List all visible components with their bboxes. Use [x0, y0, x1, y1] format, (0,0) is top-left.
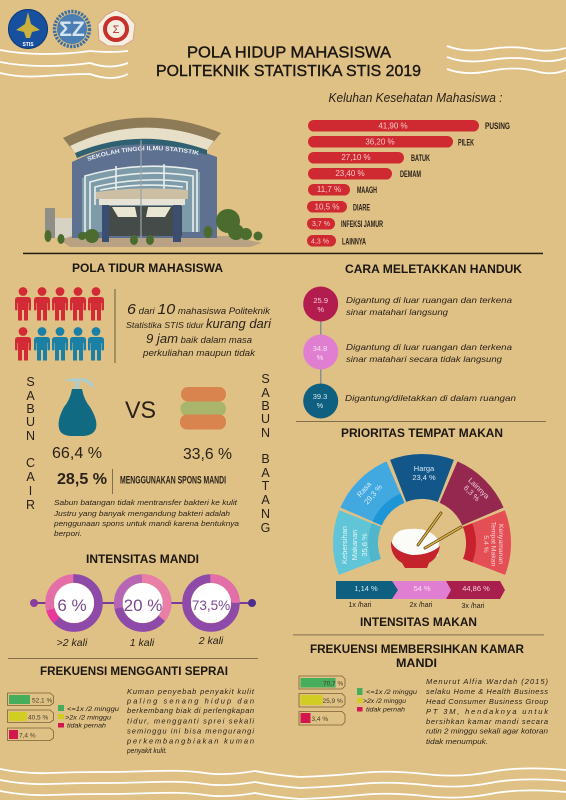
waves: top left — [0, 50, 128, 78]
heading: handuk: CARA MELETAKKAN HANDUK — [345, 264, 523, 276]
bar: pusing — [308, 120, 510, 132]
bar: batuk: BATUK — [411, 153, 430, 164]
heading: pola tidur: POLA TIDUR MAHASISWA — [72, 263, 223, 275]
heading: intensitas makan: INTENSITAS MAKAN — [360, 617, 477, 629]
bar: lainnya: 4,3 % — [311, 238, 329, 246]
item: digantung langsung: Digantung di luar ruangan dan terkena — [346, 295, 512, 305]
segment: lainnya — [440, 461, 504, 525]
segment: kenyamanan: 5,4 % — [482, 535, 489, 553]
battery chart: kamar mandi: 70,7 % — [323, 680, 343, 688]
bar: lainnya: LAINNYA — [342, 236, 366, 248]
stat: sabun batang: 33,6 % — [183, 446, 232, 463]
bar: diare: 10,5 % — [315, 202, 339, 212]
text: seprai note: Kuman penyebab penyakit kulit — [127, 687, 255, 696]
logo: STIS: STIS — [22, 42, 34, 48]
segment: lainnya: Lainnya — [466, 476, 492, 501]
segment: kenyamanan: Kenyamanan — [497, 524, 504, 564]
heading: kamar mandi: FREKUENSI MEMBERSIHKAN KAMAR — [310, 644, 525, 656]
text: seprai note — [126, 687, 255, 755]
logo: gear: ΣZ — [59, 18, 85, 41]
segment: rasa: Rasa — [355, 479, 374, 499]
ring: 1 time: 1 kali — [130, 637, 155, 649]
ring: 1 time: 20 % — [124, 596, 162, 615]
panel: intensitas mandi — [30, 554, 256, 649]
text: pola tidur: 9 jam baik dalam masa — [146, 332, 252, 346]
panel: frekuensi kamar mandi — [299, 644, 549, 746]
segment: kebersihan: 35,6 % — [360, 533, 369, 557]
bar: batuk — [308, 152, 430, 164]
text: sabun note: penggunaan spons untuk mandi karena bentuknya — [53, 519, 239, 528]
panel: pola tidur — [15, 263, 272, 363]
vertical label: sabun cair: R — [26, 498, 35, 512]
item: di dalam ruangan: 39.3 — [313, 392, 327, 401]
panel: handuk — [303, 264, 523, 418]
bar: infeksi jamur — [307, 218, 383, 230]
bar: maagh: MAAGH — [357, 185, 377, 196]
stat: sabun cair: 66,4 % — [52, 445, 102, 462]
segment: kebersihan — [333, 510, 381, 575]
text: kamar mandi note: Menurut Alfia Wardah (2015) — [426, 677, 548, 686]
bar: demam: 23,40 % — [335, 169, 365, 178]
vertical label: sabun batang: T — [262, 479, 270, 493]
logo: shield: Σ — [113, 24, 120, 36]
chart: intensitas makan arrows: 1x /hari — [349, 602, 372, 609]
vertical label: sabun batang: A — [261, 466, 270, 480]
text: pola tidur — [126, 301, 272, 358]
ring: 2 times — [186, 578, 236, 647]
stat: spons mandi: MENGGUNAKAN SPONS MANDI — [120, 474, 226, 486]
connector — [30, 599, 256, 607]
item: digantung langsung: sinar matahari langsung — [346, 307, 448, 317]
vertical label: sabun cair: N — [26, 429, 35, 443]
segment: harga — [390, 454, 454, 502]
ring: 2 times: 73,5% — [192, 598, 230, 613]
bar: demam: DEMAM — [400, 169, 421, 180]
item: digantung tidak langsung: 34.8 — [313, 344, 327, 353]
chart: intensitas makan arrows: 54 % — [413, 584, 431, 593]
item: digantung langsung: 25.9 — [313, 296, 328, 305]
heading: kamar mandi: MANDI — [396, 658, 437, 670]
vertical label: sabun cair: S — [26, 375, 35, 389]
vertical label: sabun cair: A — [26, 389, 35, 403]
vertical label: sabun batang: N — [261, 507, 270, 521]
text: seprai note: penyakit kulit. — [126, 746, 167, 755]
vertical label: sabun cair: I — [29, 484, 32, 498]
text: seprai note: tidur, mengganti sprei sekali — [127, 716, 254, 726]
vertical label: sabun batang: G — [261, 521, 270, 535]
segment: kebersihan: Makanan — [350, 530, 359, 560]
text: seprai note: berkembang biak di perlengkapan — [127, 706, 254, 715]
text: kamar mandi note: PT 3M, hendaknya untuk — [426, 707, 549, 716]
bar: pilek: 36,20 % — [365, 138, 395, 146]
chart: intensitas makan arrows: 44,86 % — [462, 584, 490, 593]
illustration: campus building — [44, 118, 262, 247]
vertical label: sabun batang: A — [261, 386, 270, 400]
vertical label: sabun batang: A — [261, 493, 270, 507]
icon: soap bars — [180, 387, 226, 430]
chart: intensitas makan arrows: 3x /hari — [462, 603, 485, 610]
legend: seprai: >2x /2 minggu — [65, 714, 112, 722]
stat: spons mandi — [57, 469, 226, 494]
text: pola tidur: perkuliahan maupun tidak — [142, 348, 256, 358]
text: kamar mandi note — [426, 677, 549, 746]
segment: rasa — [340, 461, 404, 525]
segment: harga: 23,4 % — [412, 473, 436, 482]
vertical label: sabun cair: U — [26, 415, 35, 429]
legend: seprai: tidak pernah — [67, 722, 107, 730]
heading: intensitas mandi: INTENSITAS MANDI — [86, 554, 199, 566]
vertical label: sabun cair: B — [26, 402, 35, 416]
item: digantung tidak langsung: % — [317, 353, 324, 362]
bar: pusing: PUSING — [485, 121, 510, 132]
text: sabun note: Sabun batangan tidak mentransfer bakteri ke kulit — [54, 498, 238, 507]
text: seprai note: perkembangbiakan kuman — [126, 736, 254, 746]
waves: bottom — [0, 768, 566, 799]
text: seprai note: paling senang hidup dan — [126, 696, 254, 706]
ring: more than 2 times: 6 % — [57, 596, 87, 615]
text: kamar mandi note: tidak menumpuk. — [426, 737, 488, 746]
item: di dalam ruangan: % — [317, 401, 324, 410]
bar: pilek: PILEK — [458, 138, 474, 148]
segment: kebersihan: Kebersihan — [340, 526, 349, 564]
chart: intensitas makan arrows — [336, 581, 505, 610]
vertical label: sabun batang — [261, 372, 270, 535]
vertical label: sabun cair — [26, 375, 35, 512]
vertical label: sabun batang: B — [261, 452, 270, 466]
text: sabun note: berpori. — [54, 529, 82, 538]
chart: intensitas makan arrows: 1,14 % — [354, 584, 378, 593]
bar: lainnya — [307, 235, 366, 248]
text: vs: VS — [125, 397, 156, 424]
stat: spons mandi: 28,5 % — [57, 471, 107, 488]
legend: seprai: <=1x /2 minggu — [67, 706, 120, 713]
vertical label: sabun cair: A — [26, 470, 35, 484]
item: di dalam ruangan — [303, 384, 516, 418]
vertical label: sabun batang: N — [261, 426, 270, 440]
legend: kamar mandi: >2x /2 minggu — [363, 698, 407, 705]
icon: people row — [15, 287, 104, 360]
title — [156, 44, 421, 80]
panel: prioritas tempat makan — [333, 428, 511, 629]
text: kamar mandi note: rutin 2 minggu sekali agar kotoran — [426, 726, 548, 736]
heading: seprai: FREKUENSI MENGGANTI SEPRAI — [40, 666, 228, 678]
legend: kamar mandi — [357, 688, 418, 714]
vertical label: sabun batang: S — [261, 372, 270, 386]
item: digantung tidak langsung — [303, 334, 512, 370]
legend: seprai — [58, 705, 120, 730]
text: sabun note: Justru yang banyak mengandung bakteri adalah — [53, 509, 230, 518]
chart heading: keluhan kesehatan: Keluhan Kesehatan Mahasiswa : — [328, 91, 502, 105]
text: sabun note — [53, 498, 239, 538]
icon: rice bowl — [391, 513, 461, 568]
battery chart: kamar mandi: 25,9 % — [322, 698, 343, 705]
item: di dalam ruangan: Digantung/diletakkan di dalam ruangan — [345, 393, 516, 403]
chart: semicircle segments — [333, 454, 511, 575]
text: kamar mandi note: bersihkan kamar mandi secara — [426, 717, 548, 726]
segment: harga: Harga — [414, 464, 435, 473]
text: kamar mandi note: selaku Home & Health Business — [426, 687, 548, 696]
text: pola tidur: 6 dari 10 mahasiswa Politeknik — [127, 301, 271, 318]
heading: kamar mandi — [310, 644, 525, 670]
chart: intensitas makan arrows: 2x /hari — [410, 602, 433, 609]
bar: maagh: 11,7 % — [317, 185, 341, 194]
text: pola tidur: Statistika STIS tidur kurang dari — [126, 317, 272, 331]
vertical label: sabun batang: B — [261, 399, 270, 413]
bar: maagh — [308, 184, 377, 196]
title: POLITEKNIK STATISTIKA STIS 2019 — [156, 63, 421, 80]
bar: pusing: 41,90 % — [378, 122, 408, 130]
bar: infeksi jamur: INFEKSI JAMUR — [341, 219, 383, 230]
title: POLA HIDUP MAHASISWA — [187, 44, 391, 62]
ring: more than 2 times: >2 kali — [57, 637, 88, 649]
battery chart: seprai: 40,5 % — [28, 714, 48, 722]
illustration: campus building: SEKOLAH TINGGI ILMU STATISTIK — [87, 146, 199, 160]
panel: frekuensi seprai — [8, 666, 255, 755]
battery chart: kamar mandi — [299, 676, 345, 725]
item: digantung tidak langsung: sinar matahari secara tidak langsung — [346, 354, 502, 364]
bar: diare: DIARE — [353, 202, 370, 214]
segment: rasa: 29,3 % — [362, 482, 384, 506]
text: kamar mandi note: Head Consumer Business Group — [426, 697, 548, 706]
bar chart: keluhan kesehatan — [307, 120, 510, 248]
segment: kenyamanan — [463, 510, 511, 575]
item: digantung langsung: % — [317, 305, 324, 314]
legend: kamar mandi: <=1x /2 minggu — [366, 689, 418, 696]
segment: lainnya: 6,3 % — [462, 483, 482, 503]
waves: top right — [447, 46, 566, 73]
legend: kamar mandi: tidak pernah — [366, 706, 406, 714]
battery chart: seprai — [8, 693, 54, 740]
battery chart: seprai: 52,1 % — [32, 698, 52, 704]
item: digantung tidak langsung: Digantung di luar ruangan dan terkena — [346, 342, 512, 352]
bar: infeksi jamur: 3,7 % — [312, 221, 330, 228]
ring: 2 times: 2 kali — [198, 635, 224, 647]
heading: prioritas: PRIORITAS TEMPAT MAKAN — [341, 428, 503, 440]
bar: pilek — [308, 136, 474, 148]
bar: batuk: 27,10 % — [341, 153, 371, 162]
segment: kenyamanan: Tempat Makan — [490, 522, 496, 567]
vertical label: sabun batang: U — [261, 412, 270, 426]
ring: 1 time — [118, 578, 167, 649]
battery chart: kamar mandi: 3,4 % — [312, 716, 328, 723]
icon: liquid soap bottle — [59, 378, 96, 436]
bar: demam — [308, 168, 421, 180]
item: digantung langsung — [303, 286, 512, 322]
battery chart: seprai: 7,4 % — [19, 732, 36, 740]
logos — [8, 9, 135, 49]
ring: more than 2 times — [50, 578, 98, 649]
bar: diare — [307, 201, 370, 214]
text: seprai note: seminggu ini bisa mengurangi — [127, 726, 254, 736]
vertical label: sabun cair: C — [26, 456, 35, 470]
